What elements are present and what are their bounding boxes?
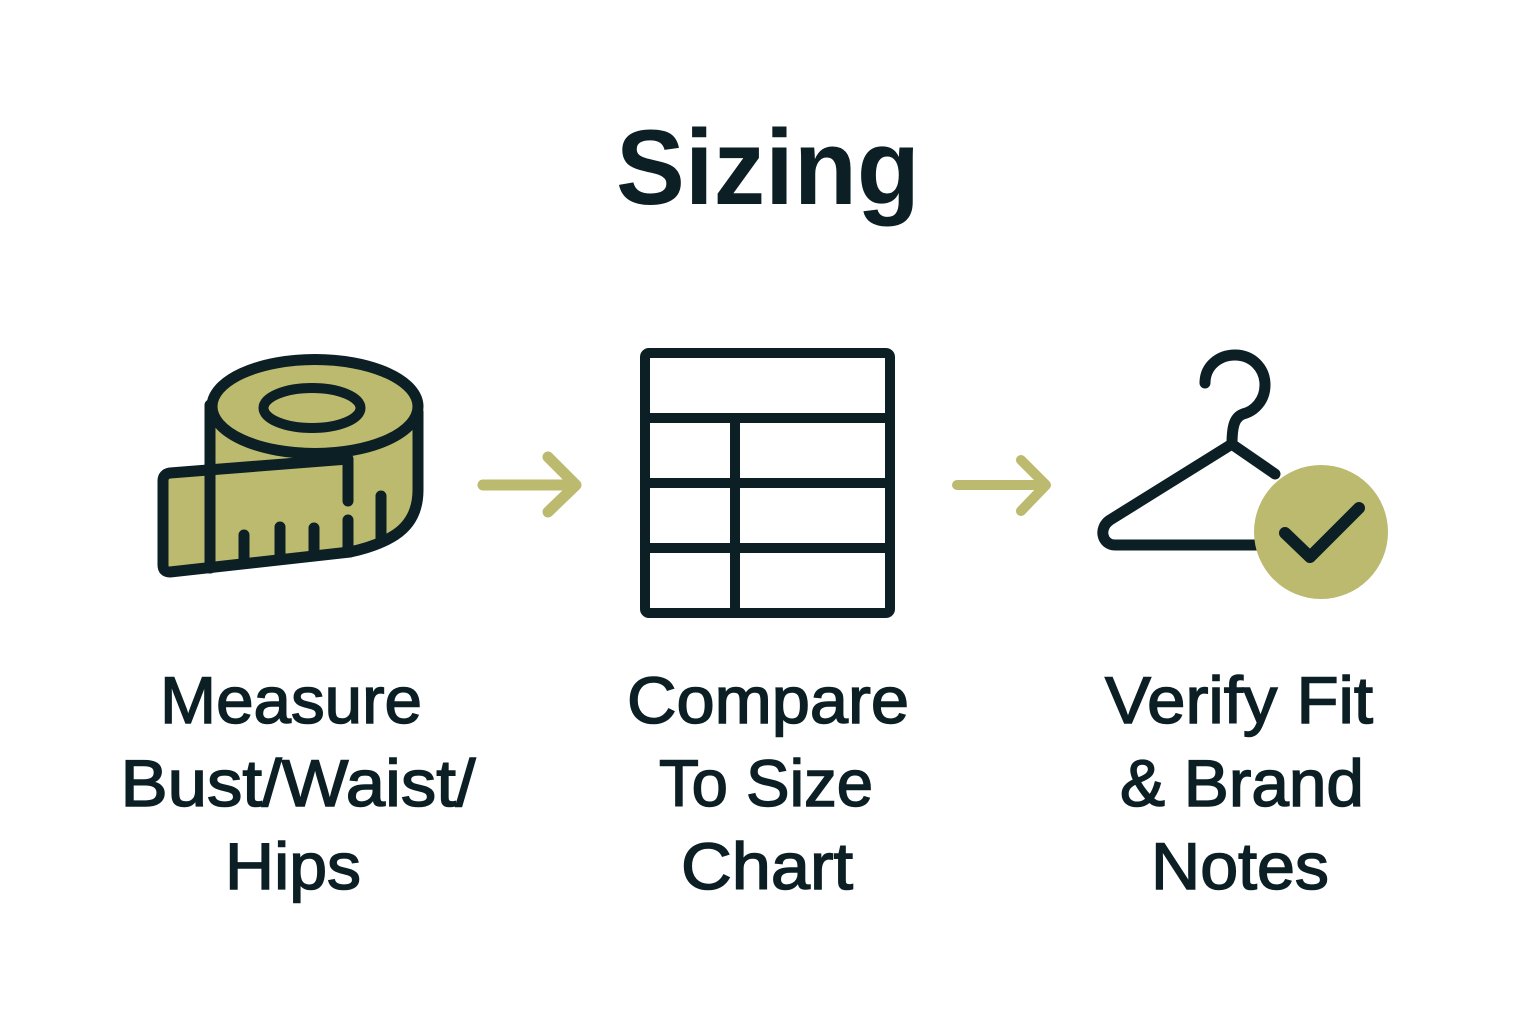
label: step 1: Hips <box>225 829 361 903</box>
label: step 2: Chart <box>681 829 853 903</box>
arrow: compare to verify <box>957 460 1046 511</box>
title: Sizing <box>616 107 920 227</box>
label: step 3: Notes <box>1151 829 1329 903</box>
hanger <box>1103 355 1275 545</box>
check badge <box>1254 465 1388 599</box>
label: step 1: Measure <box>160 663 422 737</box>
label: step 2: Compare <box>627 663 909 737</box>
label: step 1 <box>120 663 476 903</box>
icon: measuring tape <box>163 360 418 572</box>
arrow: measure to compare <box>483 457 576 512</box>
label: step 3: Verify Fit <box>1105 663 1373 737</box>
label: step 2: To Size <box>659 746 873 820</box>
icon: hanger with check badge <box>1103 355 1388 599</box>
label: step 3 <box>1105 663 1373 903</box>
label: step 2 <box>627 663 909 903</box>
label: step 1: Bust/Waist/ <box>120 746 476 820</box>
icon: size chart table <box>645 353 890 613</box>
label: step 3: & Brand <box>1120 746 1364 820</box>
